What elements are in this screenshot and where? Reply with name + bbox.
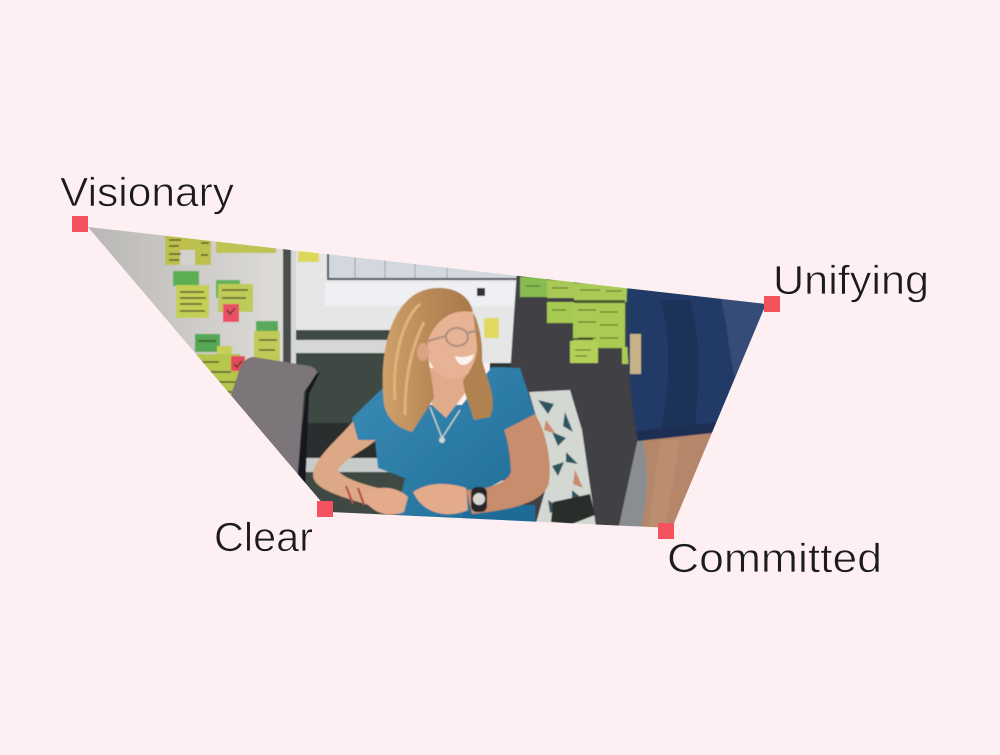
marker: Visionary xyxy=(72,216,88,232)
marker: Clear xyxy=(317,501,333,517)
man: grey mesh chair xyxy=(618,440,648,526)
sticky notes: left wall xyxy=(165,235,280,404)
man: arm xyxy=(641,432,712,528)
label: Visionary: Visionary xyxy=(60,169,235,215)
woman: near arm xyxy=(466,414,550,514)
woman: hair, right strand xyxy=(463,312,493,420)
label: Unifying: Unifying xyxy=(773,257,929,303)
whiteboard xyxy=(296,251,517,364)
woman: watch xyxy=(471,487,487,512)
dark felt board xyxy=(502,276,644,526)
office wall xyxy=(88,227,284,362)
woman: smile xyxy=(455,354,474,365)
infographic canvas xyxy=(60,176,926,572)
marker: Committed xyxy=(658,523,674,539)
woman: hair, left mass xyxy=(383,288,473,432)
woman: face in three quarter view xyxy=(426,310,478,378)
woman: ear xyxy=(417,343,429,361)
photo in quadrilateral frame xyxy=(80,220,785,532)
man: navy shirt sleeve xyxy=(626,288,736,440)
sticky notes: felt board xyxy=(520,277,634,364)
woman: glasses xyxy=(428,328,478,346)
woman: blue top xyxy=(352,367,535,522)
flower patterned chair xyxy=(529,390,596,527)
label: Committed: Committed xyxy=(667,535,882,581)
office chair back xyxy=(230,357,317,485)
woman: far arm xyxy=(313,420,386,506)
woman: chest and neck xyxy=(430,368,468,418)
marker: Unifying xyxy=(764,296,780,312)
man: shirt emblem xyxy=(630,334,641,374)
dark window frame xyxy=(282,249,292,364)
label: Clear: Clear xyxy=(214,514,313,560)
woman: necklace xyxy=(430,407,460,438)
woman: hands xyxy=(362,488,408,515)
window and glass below board xyxy=(296,330,406,525)
